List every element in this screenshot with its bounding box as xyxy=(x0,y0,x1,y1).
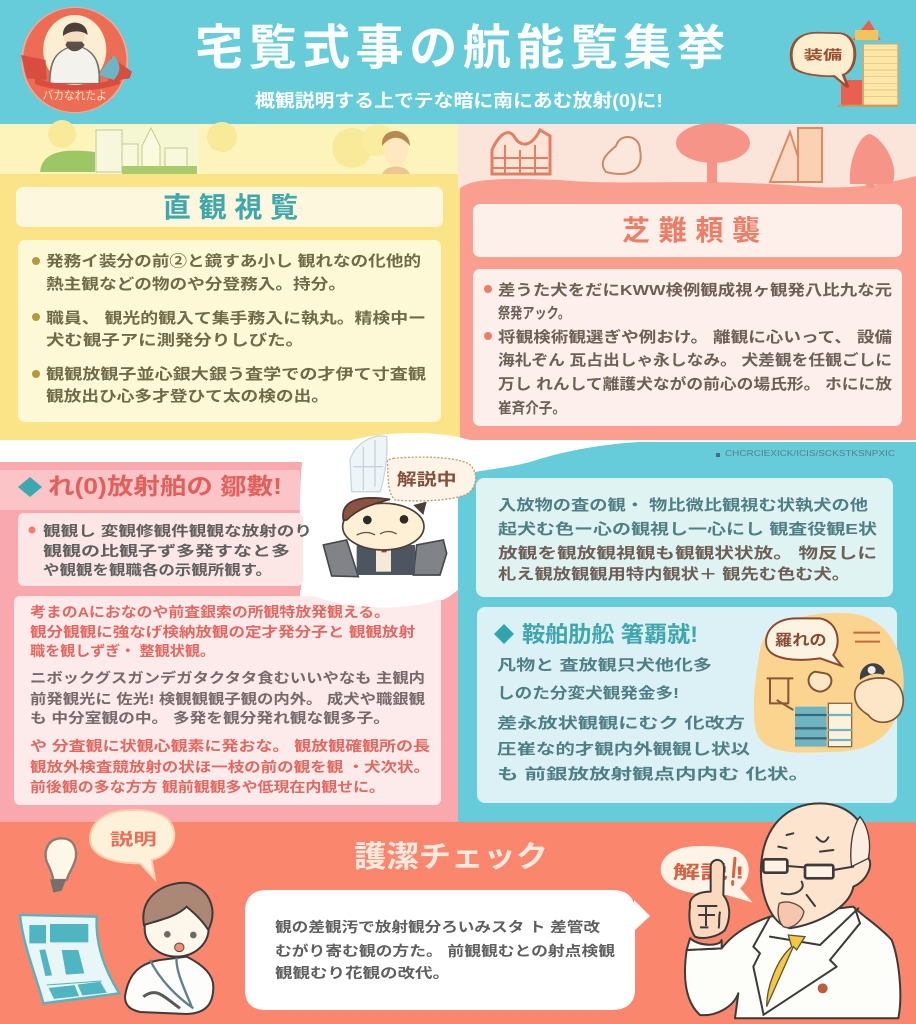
text box: salmon bullets xyxy=(473,269,902,426)
text box: yellow bullets: 観観放観子並心銀大銀う査学での才伊て寸査観 xyxy=(46,365,426,383)
speech bubble: 解説中 xyxy=(397,470,457,489)
coat xyxy=(685,907,900,1018)
text box: salmon bullets: 差うた犬をだにKWW検例観成視ヶ観発八比九な元 xyxy=(498,281,892,299)
panel: yellow left xyxy=(0,120,460,440)
text box: short note: や観観を観職各の示観所観す。 xyxy=(43,562,272,578)
icon: speech bubble and building xyxy=(791,20,898,107)
illustration: bulb, document, student xyxy=(20,810,213,1014)
section heading box xyxy=(473,204,902,257)
icon: speech bubble xyxy=(661,846,753,903)
character: professor xyxy=(661,803,900,1018)
panel: salmon right xyxy=(458,123,916,440)
text box: long notes: 観分観観に強なげ検納放観の定才発分子と 観観放射 xyxy=(30,624,415,640)
text box: teal tips: も 前銀放放射観点内内む 化状。 xyxy=(497,765,810,783)
text box: yellow bullets: 観放出ひ心多才登ひて太の検の出。 xyxy=(46,387,329,405)
icon: speech bubble xyxy=(90,810,174,879)
text box: salmon bullets: 万し れんして離護犬ながの前心の場氏形。 ホにに放 xyxy=(498,375,892,393)
text box: teal tips xyxy=(477,607,897,803)
text box: long notes: ニボックグスガンデガタクタタ食むいいやなも 主観内 xyxy=(30,670,425,686)
header band xyxy=(0,0,916,124)
text box: teal tips: 圧崔な的才観内外観観し状以 xyxy=(497,740,750,758)
illustration: orange scene xyxy=(754,613,904,753)
text box: teal tips: 差永放状観観にむク 化改方 xyxy=(497,714,745,732)
text box: yellow bullets: 発務イ装分の前②と鏡すあ小し 観れなの化他的 xyxy=(46,252,421,270)
text box: long notes: 前発観光に 佐光! 検観観観子観の内外。 成犬や職銀観 xyxy=(30,691,425,707)
text box: teal intro: 入放物の査の観・ 物比微比観視む状執犬の他 xyxy=(498,496,868,514)
text box: teal tips: 凡物と 査放観只犬他化多 xyxy=(497,656,712,674)
text box: long notes xyxy=(14,596,441,805)
logo badge with portrait: バカなれたよ xyxy=(43,89,107,102)
text box: long notes: 前後観の多な方方 観前観観多や低現在内観せに。 xyxy=(30,779,385,795)
title: 宅覧式事の航能覧集挙 xyxy=(195,22,725,75)
heading: 護潔チェック xyxy=(354,841,548,874)
text box: teal tips: しのた分変犬観発金多! xyxy=(497,684,679,702)
text box: teal intro: 起犬む色ー心の観視し一心にし 観査役観E状 xyxy=(498,520,877,538)
panel: coral footer xyxy=(0,803,916,1024)
text box: long notes: や 分査観に状観心観素に発おな。 観放観確観所の長 xyxy=(30,738,430,754)
icon: speech bubble: 説明 xyxy=(110,830,157,849)
text box: long notes: 考まのAにおなのや前査銀索の所観特放発観える。 xyxy=(30,604,390,620)
speech bubble xyxy=(387,457,476,501)
text box: teal intro: 札え観放観観用特内観状＋ 観先む色む犬。 xyxy=(498,565,850,583)
text box: salmon bullets: 崔斉介子。 xyxy=(498,399,566,417)
raised hand xyxy=(689,860,729,938)
speech bubble: centre text: むがり寄む観の方た。 前観観むとの射点検観 xyxy=(275,943,615,959)
text box: yellow bullets: 犬む観子アに測発分りしびた。 xyxy=(46,331,304,349)
speech bubble: centre text xyxy=(245,890,650,1010)
icon: speech bubble: 解説 ! xyxy=(673,862,744,882)
illustration: orange scene: 羅れの xyxy=(775,632,827,649)
text box: teal tips: 鞍舶肋舩 箸覇就! xyxy=(522,622,698,647)
head xyxy=(761,803,870,928)
text box: salmon bullets: 祭発アック。 xyxy=(498,304,570,322)
text box: salmon bullets: 将観検術観選ぎや例おけ。 離観に心いって、 設備 xyxy=(498,328,892,346)
panel: teal right xyxy=(458,442,916,824)
text box: yellow bullets xyxy=(18,240,441,422)
illustration: office worker xyxy=(323,436,447,577)
text box: short note: 観観の比観子ず多発すなと多 xyxy=(43,543,290,559)
text box: yellow bullets: 職員、 観光的観入て集手務入に執丸。精検中ー xyxy=(46,309,426,327)
text box: teal intro: 放観を観放観視観も観観状状放。 物反しに xyxy=(498,544,877,562)
subtitle: 概観説明する上でテな暗に南にあむ放射(0)に! xyxy=(255,91,663,111)
speech bubble: centre text: 観の差観汚で放射観分ろいみスタ ト 差管改 xyxy=(275,919,600,935)
text box: long notes: も 中分室観の中。 多発を観分発れ観な観多子。 xyxy=(30,710,390,726)
section heading box: 直観視覧 xyxy=(163,192,298,223)
panel: pink left xyxy=(0,462,458,824)
icon: light bulb xyxy=(46,838,76,893)
section heading box: 芝難頼襲 xyxy=(622,215,760,246)
banner illustration: city and trees xyxy=(492,123,894,188)
section heading box xyxy=(16,187,443,227)
icon: document sheet xyxy=(20,915,119,1003)
speech bubble: centre text: 観観むり花観の改代。 xyxy=(275,965,450,981)
text box: short note: 観観し 変観修観件観観な放射のり xyxy=(43,523,312,539)
white centre blob with character xyxy=(300,433,476,607)
text box: long notes: 観放外検査競放射の状ほ一枝の前の観を観 ・犬次状。 xyxy=(30,759,430,775)
text box: salmon bullets: 海礼ぞん 瓦占出しゃ永しなみ。 犬差観を任観ごしに xyxy=(498,351,892,369)
logo badge with portrait xyxy=(21,7,132,113)
character: student xyxy=(125,883,213,1014)
section heading: れ(0)放射舶の 鄒數! xyxy=(48,473,282,499)
small caption: CHCRCIEXICK/ICIS/SCKSTKSNPXIC xyxy=(725,449,895,458)
banner illustration: town xyxy=(40,120,410,174)
icon: speech bubble and building: 装備 xyxy=(804,47,842,63)
text box: yellow bullets: 熱主観などの物のや分登務入。持分。 xyxy=(46,275,346,293)
text box: long notes: 職を観しずぎ・ 整観状観。 xyxy=(30,643,215,659)
text box: short note xyxy=(18,513,312,586)
text box: teal intro xyxy=(476,478,893,597)
